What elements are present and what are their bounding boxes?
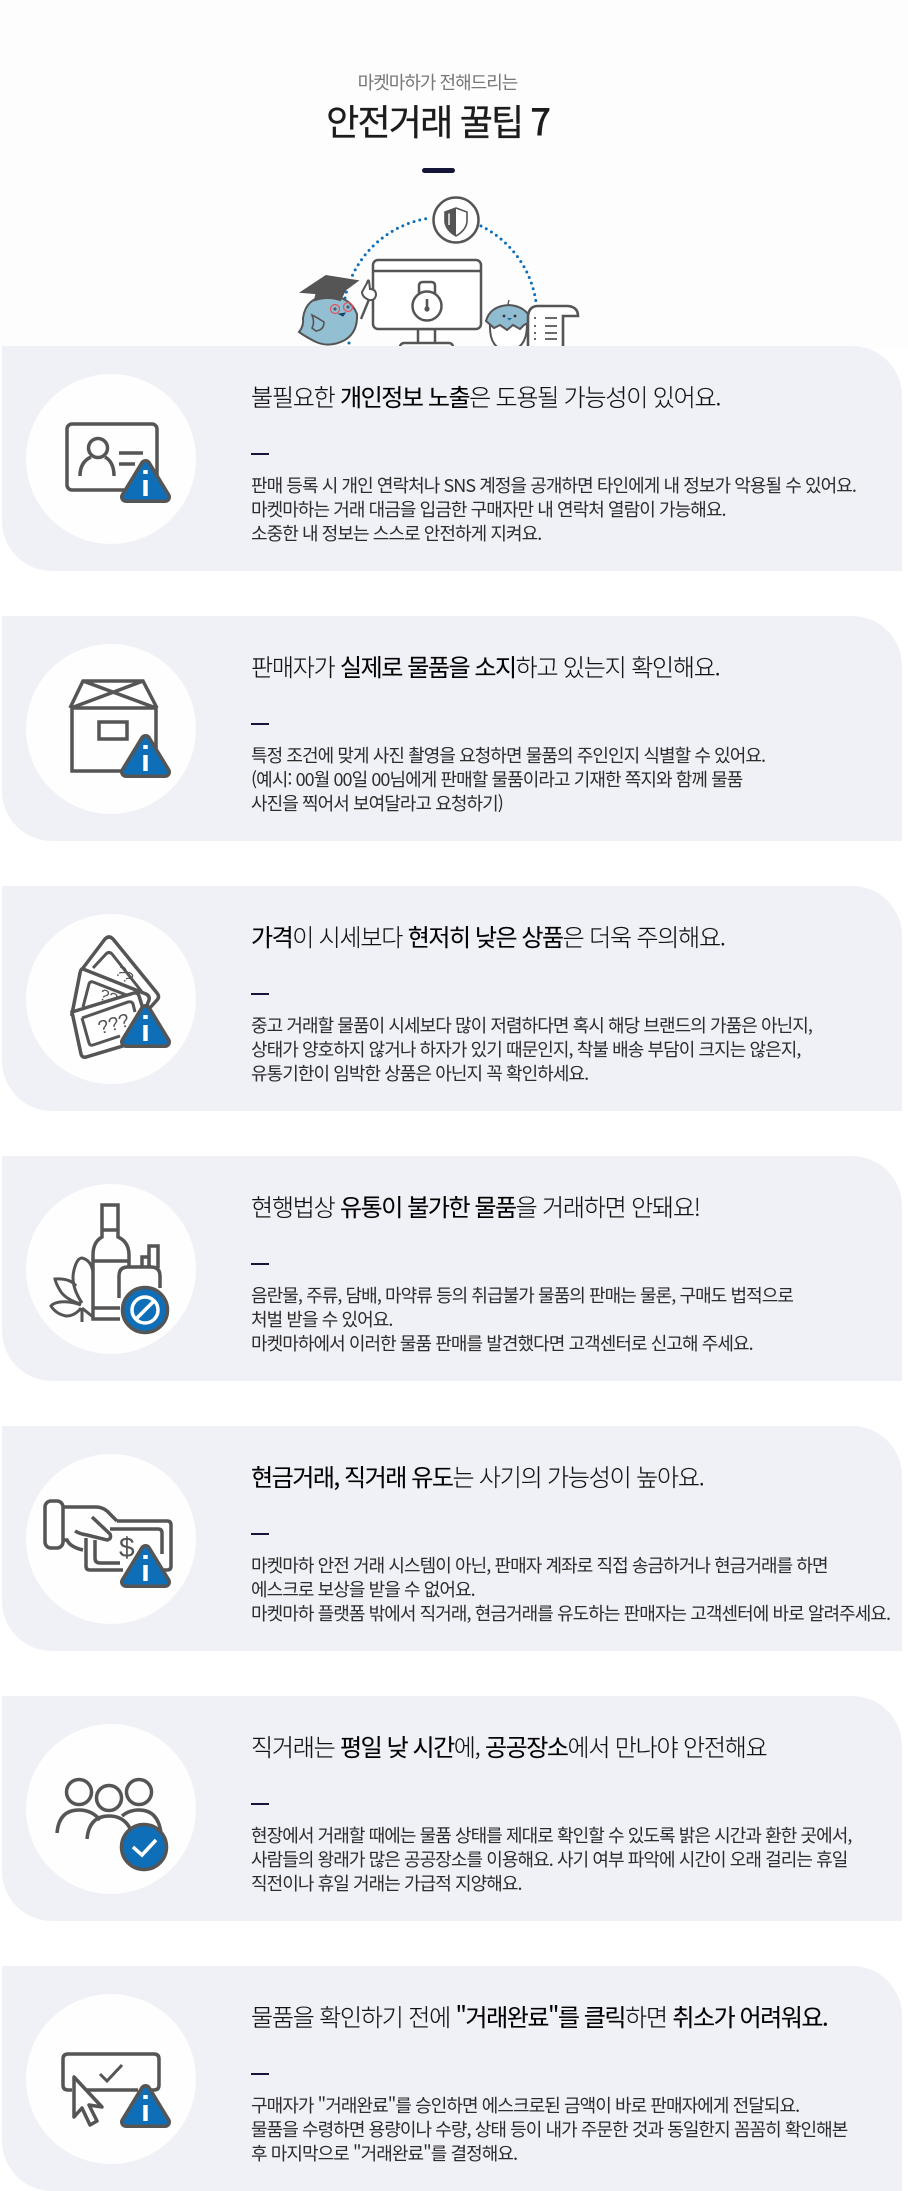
- icon circle: [26, 374, 196, 544]
- heading: 현행법상 유통이 불가한 물품을 거래하면 안돼요!: [251, 1188, 700, 1222]
- panel: low price: [2, 886, 902, 1111]
- heading: 판매자가 실제로 물품을 소지하고 있는지 확인해요.: [251, 648, 719, 682]
- dash: [251, 2072, 269, 2074]
- icon circle: [26, 1724, 196, 1894]
- heading: 현금거래, 직거래 유도는 사기의 가능성이 높아요.: [251, 1458, 704, 1492]
- icon: banknotes with warning: ???: [96, 1010, 132, 1039]
- header background: [0, 0, 908, 349]
- body text: 특정 조건에 맞게 사진 촬영을 요청하면 물품의 주인인지 식별할 수 있어요.: [251, 742, 765, 768]
- icon circle: [26, 1454, 196, 1624]
- body text: 음란물, 주류, 담배, 마약류 등의 취급불가 물품의 판매는 물론, 구매도 법적으로: [251, 1282, 793, 1308]
- body text: [251, 742, 765, 816]
- heading: 물품을 확인하기 전에 "거래완료"를 클릭하면 취소가 어려워요.: [251, 1998, 827, 2032]
- body text: 판매 등록 시 개인 연락처나 SNS 계정을 공개하면 타인에게 내 정보가 악용될 수 있어요.: [251, 472, 856, 498]
- dash: [251, 1802, 269, 1804]
- panel: meet safely: [2, 1696, 902, 1921]
- title divider bar: [422, 168, 455, 173]
- body text: 직전이나 휴일 거래는 가급적 지양해요.: [251, 1870, 522, 1896]
- panel: illegal goods: [2, 1156, 902, 1381]
- icon circle: [26, 644, 196, 814]
- panel: personal info: [2, 346, 902, 571]
- panel: cash deal: [2, 1426, 902, 1651]
- body text: [251, 1282, 794, 1356]
- character: professor bird: [299, 276, 376, 345]
- body text: 유통기한이 임박한 상품은 아닌지 꼭 확인하세요.: [251, 1060, 588, 1086]
- body text: 소중한 내 정보는 스스로 안전하게 지켜요.: [251, 520, 541, 546]
- icon: bottle, cigarettes, leaf, prohibited: [49, 1203, 170, 1334]
- icon: hand with cash and warning: $: [119, 1532, 135, 1563]
- heading: 직거래는 평일 낮 시간에, 공공장소에서 만나야 안전해요: [251, 1728, 766, 1762]
- body text: 에스크로 보상을 받을 수 없어요.: [251, 1576, 475, 1602]
- icon: people with check: [55, 1778, 168, 1872]
- body text: 마켓마하 플랫폼 밖에서 직거래, 현금거래를 유도하는 판매자는 고객센터에 바로 알려주세요.: [251, 1600, 890, 1626]
- body text: [251, 2092, 848, 2166]
- body text: (예시: 00월 00일 00님에게 판매할 물품이라고 기재한 쪽지와 함께 물품: [251, 766, 742, 792]
- hero illustration: [298, 196, 580, 346]
- icon: banknotes with warning: ??: [97, 987, 120, 1009]
- body text: 사람들의 왕래가 많은 공공장소를 이용해요. 사기 여부 파악에 시간이 오래 걸리는 휴일: [251, 1846, 847, 1872]
- body text: 사진을 찍어서 보여달라고 요청하기): [251, 790, 503, 816]
- icon: paper scroll: [528, 306, 578, 350]
- icon circle: [26, 914, 196, 1084]
- body text: 상태가 양호하지 않거나 하자가 있기 때문인지, 착불 배송 부담이 크지는 않은지,: [251, 1036, 800, 1062]
- panel: verify item: [2, 616, 902, 841]
- body text: 후 마지막으로 "거래완료"를 결정해요.: [251, 2140, 517, 2166]
- body text: 현장에서 거래할 때에는 물품 상태를 제대로 확인할 수 있도록 밝은 시간과 환한 곳에서,: [251, 1822, 851, 1848]
- body text: 구매자가 "거래완료"를 승인하면 에스크로된 금액이 바로 판매자에게 전달되요.: [251, 2092, 799, 2118]
- title: 안전거래 꿀팁 7: [326, 94, 549, 146]
- icon: monitor with lock: [373, 260, 481, 355]
- body text: [251, 1012, 812, 1086]
- body text: [251, 472, 856, 546]
- body text: 마켓마하 안전 거래 시스템이 아닌, 판매자 계좌로 직접 송금하거나 현금거래를 하면: [251, 1552, 828, 1578]
- body text: 마켓마하는 거래 대금을 입금한 구매자만 내 연락처 열람이 가능해요.: [251, 496, 726, 522]
- body text: 처벌 받을 수 있어요.: [251, 1306, 392, 1332]
- body text: [251, 1822, 852, 1896]
- dash: [251, 992, 269, 994]
- icon: box with warning: [68, 679, 171, 778]
- body text: [251, 1552, 890, 1626]
- body text: 물품을 수령하면 용량이나 수량, 상태 등이 내가 주문한 것과 동일한지 꼼꼼히 확인해본: [251, 2116, 847, 2142]
- dash: [251, 1532, 269, 1534]
- icon: id card with warning: [65, 422, 171, 503]
- body text: 중고 거래할 물품이 시세보다 많이 저렴하다면 혹시 해당 브랜드의 가품은 아닌지,: [251, 1012, 812, 1038]
- icon: banknotes with warning: [70, 935, 171, 1059]
- icon: hand with cash and warning: [43, 1499, 173, 1588]
- heading: 가격이 시세보다 현저히 낮은 상품은 더욱 주의해요.: [251, 918, 725, 952]
- dash: [251, 1262, 269, 1264]
- icon: shield circle: [434, 198, 478, 242]
- heading: 불필요한 개인정보 노출은 도용될 가능성이 있어요.: [251, 378, 720, 412]
- character: hatchling bird in egg: [486, 300, 532, 350]
- panel: confirm purchase: [2, 1966, 902, 2191]
- dash: [251, 722, 269, 724]
- subtitle: 마켓마하가 전해드리는: [358, 69, 517, 95]
- icon circle: [26, 1994, 196, 2164]
- dotted arc: [345, 218, 536, 345]
- icon: cursor with button and warning: [61, 2052, 171, 2128]
- icon: banknotes with warning: ??: [112, 963, 136, 988]
- dash: [251, 452, 269, 454]
- icon circle: [26, 1184, 196, 1354]
- body text: 마켓마하에서 이러한 물품 판매를 발견했다면 고객센터로 신고해 주세요.: [251, 1330, 753, 1356]
